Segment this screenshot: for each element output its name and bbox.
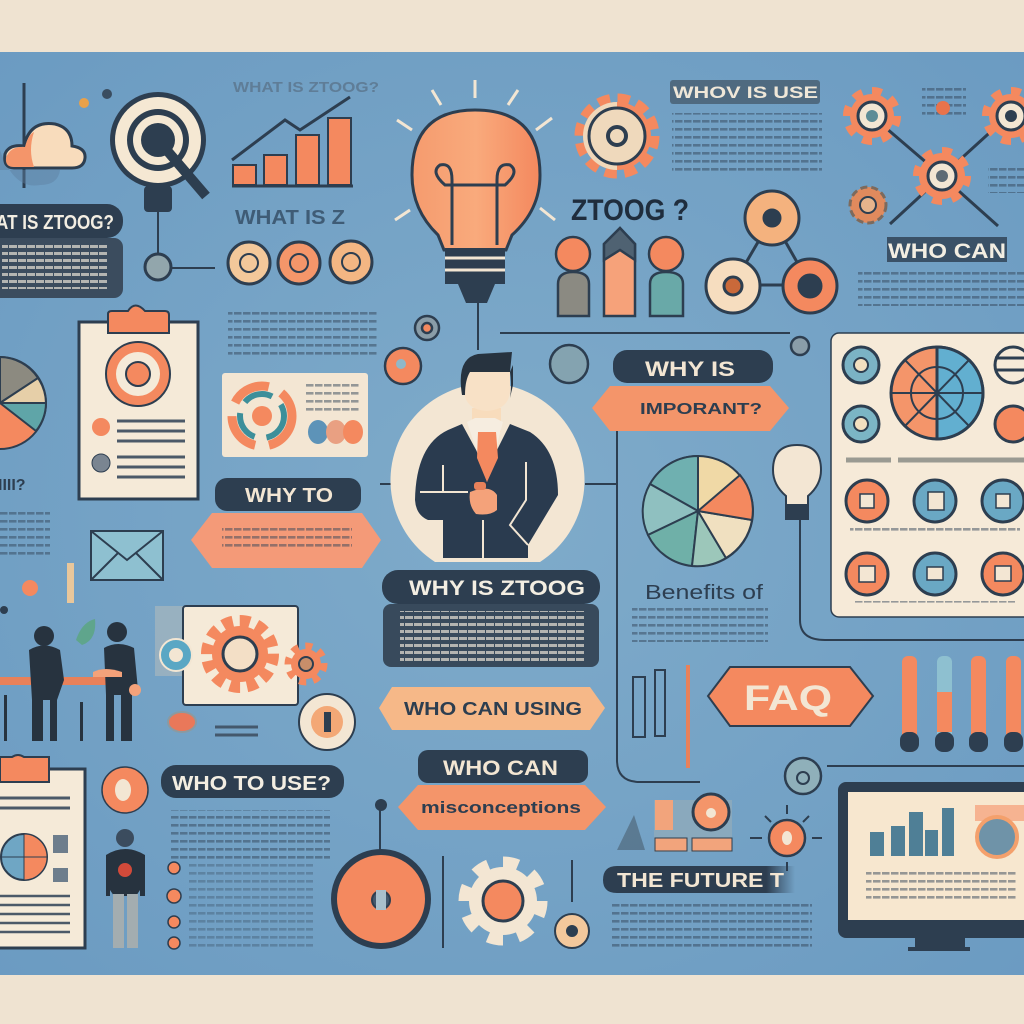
heading pill: what is ztoog left	[0, 204, 123, 238]
icons: small orange circles	[385, 316, 809, 384]
heading: who can: WHO CAN	[888, 240, 1006, 263]
banner: misconceptions	[398, 785, 606, 830]
heading: who to use: WHO TO USE?	[172, 773, 331, 795]
heading: who to use	[161, 765, 344, 798]
heading: whov is use: WHOV IS USE	[673, 83, 818, 102]
bar chart: rising bars	[232, 97, 353, 186]
icon: document with gear	[617, 794, 732, 852]
icon: letter s badge	[102, 767, 148, 813]
heading pill: who can: WHO CAN	[443, 757, 558, 780]
heading: benefits of: Benefits of	[645, 582, 764, 604]
banner: important: IMPORANT?	[640, 401, 762, 418]
text block: benefits copy	[632, 608, 768, 642]
heading: whov is use	[670, 80, 820, 104]
icon: envelope	[91, 531, 163, 580]
banner: orange arrow label	[191, 513, 381, 568]
icon: person with tie in circle	[390, 352, 584, 562]
illustration: people at table	[0, 619, 141, 741]
heading: why is ztoog	[382, 570, 600, 604]
icon: computer monitor	[838, 782, 1024, 951]
icons: small left items	[0, 563, 74, 614]
icon: gear top center	[580, 99, 654, 173]
icons: three circles	[228, 241, 372, 284]
banner: important	[592, 386, 789, 431]
panel: small infographic card	[222, 373, 368, 457]
connector lines	[0, 300, 1024, 855]
icon: small badge bottom	[555, 914, 589, 948]
icon: standing person	[106, 829, 145, 948]
text block: future copy	[612, 902, 812, 950]
heading pill: why to	[215, 478, 361, 511]
callout: dark text box left	[0, 238, 123, 298]
icon: round badge	[168, 694, 355, 750]
icon: three figures	[556, 228, 683, 316]
panel: clipboard bottom left	[0, 755, 85, 948]
diagram: three linked circles	[706, 191, 837, 313]
heading pill: why is	[613, 350, 773, 383]
heading: the future	[603, 866, 795, 893]
heading: why is ztoog: WHY IS ZTOOG	[409, 577, 585, 600]
chart: vertical progress bars	[900, 656, 1023, 752]
bar chart: small outline bars	[633, 665, 688, 768]
heading pill: why to: WHY TO	[245, 485, 333, 507]
callout: dark text box center	[383, 604, 599, 667]
heading: what is ztoog top: WHAT IS ZTOOG?	[233, 79, 379, 96]
heading pill: who can	[418, 750, 588, 783]
icon: target with dart	[110, 92, 215, 280]
heading pill: why is: WHY IS	[645, 358, 735, 381]
icon: central light bulb	[395, 80, 555, 303]
banner: misconceptions: misconceptions	[421, 798, 581, 817]
banner: who can using	[379, 687, 605, 730]
icon: small gear	[288, 646, 324, 682]
text block: what is copy	[228, 308, 378, 356]
banner: who can using: WHO CAN USING	[404, 699, 582, 719]
text block: who to use list	[167, 810, 330, 949]
banner: faq	[708, 667, 873, 726]
diagram: gear network top right	[847, 85, 1024, 226]
heading: ztoog: ZTOOG ?	[571, 194, 689, 227]
panel: top-left cloud icon	[0, 83, 112, 188]
text block: top right copy	[672, 113, 822, 175]
text block: who can copy	[858, 268, 1024, 306]
pie chart: center right	[643, 456, 753, 566]
panel: clipboard left	[79, 306, 198, 499]
heading pill: what is ztoog left: AT IS ZTOOG?	[0, 212, 114, 234]
icon: cream gear	[443, 856, 572, 948]
heading: what is: WHAT IS Z	[235, 207, 345, 229]
pie chart: left edge	[0, 357, 46, 449]
panel: right icons card	[831, 333, 1024, 617]
icon: large orange target	[334, 799, 428, 946]
icon: sun badge	[750, 758, 822, 871]
text block: left fragment	[0, 508, 50, 558]
banner: faq: FAQ	[744, 679, 832, 718]
icon: small light bulb	[773, 445, 821, 519]
heading: the future: THE FUTURE T	[617, 870, 784, 892]
panel: gear card	[155, 606, 298, 705]
